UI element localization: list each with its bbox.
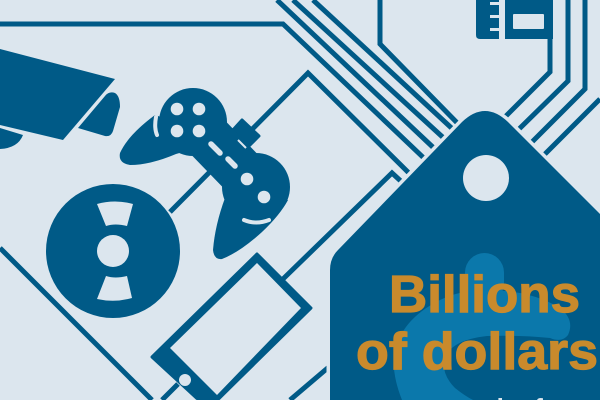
price tag: [330, 111, 600, 400]
dollar sign: [394, 253, 570, 400]
heading: of dollars: [356, 323, 598, 381]
icon: game controller: [120, 88, 290, 259]
icon: memory chip: [476, 0, 553, 39]
heading: Billions: [389, 266, 580, 324]
icon: smartphone: [152, 254, 311, 398]
icon: disc: [46, 184, 180, 318]
heading: [356, 266, 598, 381]
icon: security camera: [0, 49, 120, 149]
